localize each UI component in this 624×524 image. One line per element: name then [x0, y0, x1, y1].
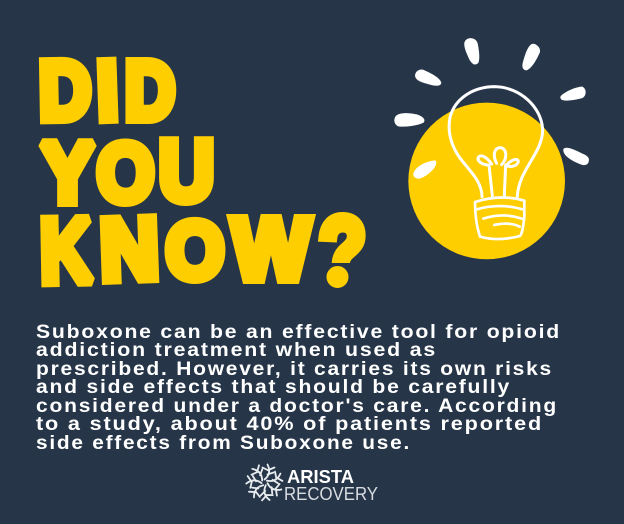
body text block: to a study, about 40% of patients reported — [36, 414, 543, 435]
title: Did You Know?: O — [166, 206, 224, 296]
infographic canvas — [36, 38, 589, 502]
rays — [395, 39, 588, 178]
title: Did You Know?: O — [97, 126, 154, 219]
title: Did You Know? — [38, 56, 366, 288]
bulb outline — [449, 87, 543, 197]
body text block: prescribed. However, it carries its own risks — [36, 359, 553, 380]
title: Did You Know?: I — [95, 44, 120, 137]
title: Did You Know?: D — [38, 44, 92, 137]
title: Did You Know?: K — [39, 201, 93, 302]
title: Did You Know?: Y — [41, 126, 94, 221]
title: Did You Know?: N — [98, 200, 161, 299]
title: Did You Know?: W — [232, 201, 311, 298]
icon: light bulb with circle and rays — [395, 39, 588, 259]
body text block: Suboxone can be an effective tool for opioid — [36, 322, 561, 343]
yellow circle — [408, 103, 565, 259]
logo: Arista Recovery: RECOVERY — [284, 483, 378, 504]
logo icon — [245, 463, 285, 503]
title: Did You Know?: ? — [319, 198, 366, 304]
body text block — [36, 322, 561, 454]
body text block: considered under a doctor's care. According — [36, 396, 558, 417]
body text block: addiction treatment when used as — [36, 340, 437, 361]
title: Did You Know?: D — [125, 44, 175, 137]
title: Did You Know?: U — [159, 124, 214, 219]
body text block: side effects from Suboxone use. — [36, 433, 411, 454]
logo wordmark: ARISTA — [287, 467, 354, 487]
filament — [478, 148, 518, 196]
body text block: and side effects that should be carefully — [36, 377, 511, 398]
logo: Arista Recovery — [245, 463, 378, 504]
bulb base — [475, 198, 524, 239]
